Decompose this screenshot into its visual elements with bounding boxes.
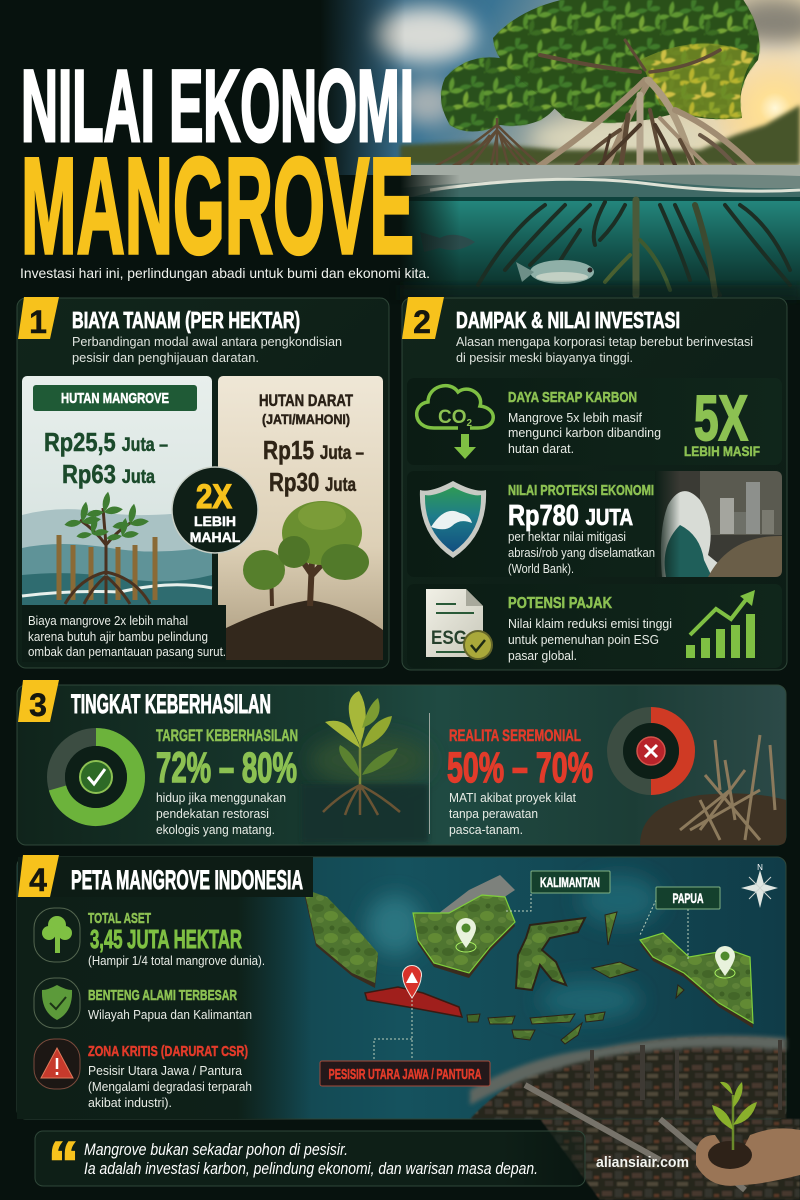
heading strip 4: 4 [29, 862, 47, 898]
mangrove price: Rp25,5 Juta – [44, 427, 168, 457]
island: north borneo [439, 875, 515, 913]
underwater roots [478, 200, 790, 295]
small tree [243, 550, 285, 606]
left dark panel [17, 897, 312, 1119]
fact: zona kritis: Pesisir Utara Jawa / Pantura [88, 1063, 243, 1078]
heading 1: BIAYA TANAM (PER HEKTAR) [72, 307, 300, 333]
far tree line [400, 105, 800, 165]
hero image: mangrove scene [320, 0, 800, 300]
title [21, 49, 414, 283]
quote box: Ia adalah investasi karbon, pelindung ekonomi, dan warisan masa depan. [84, 1159, 538, 1178]
clouds [373, 0, 800, 158]
carbon text: DAYA SERAP KARBON [508, 389, 637, 406]
description 2 [456, 334, 753, 365]
description 2: Alasan mengapa korporasi tetap berebut berinvestasi [456, 334, 753, 349]
island: papua [640, 933, 753, 1028]
badge 1: 1 [29, 304, 47, 340]
fact: total aset [34, 908, 265, 968]
fact: zona kritis: akibat industri). [88, 1095, 172, 1110]
protection text: per hektar nilai mitigasi [508, 530, 626, 544]
protection text: abrasi/rob yang diselamatkan [508, 546, 655, 560]
dead mangrove backdrop [640, 735, 786, 845]
panel 3 background [17, 685, 786, 845]
protection text: NILAI PROTEKSI EKONOMI [508, 483, 654, 499]
protection text: Rp780 JUTA [508, 500, 633, 532]
badge 2: 2 [413, 304, 431, 340]
panel 4: peta mangrove indonesia [17, 855, 786, 1160]
panel 2: dampak dan nilai investasi [402, 297, 787, 670]
icon: CO2 cloud: 2 [466, 418, 472, 429]
description 1: Perbandingan modal awal antara pengkondisian [72, 334, 342, 349]
carbon text: mengunci karbon dibanding [508, 426, 661, 440]
badge: 2x lebih mahal: LEBIH [194, 513, 236, 529]
industrial ground behind panel 4 bottom [540, 1119, 800, 1200]
badge: 2x lebih mahal [172, 467, 258, 553]
caption: mangrove cost: Biaya mangrove 2x lebih mahal [28, 614, 188, 628]
card: carbon absorption [407, 378, 782, 465]
panel 2 background [402, 298, 787, 670]
mangrove price: Rp63 Juta [62, 459, 155, 489]
carbon text: hutan darat. [508, 442, 574, 456]
subtitle: Investasi hari ini, perlindungan abadi untuk bumi dan ekonomi kita. [20, 265, 430, 281]
island: sumatra [304, 889, 378, 988]
wave and city image [655, 471, 782, 577]
sea texture [367, 875, 660, 1020]
heading 3: TINGKAT KEBERHASILAN [71, 689, 271, 719]
card: hutan darat [218, 376, 383, 660]
panel 1 background [17, 298, 389, 668]
divider [429, 713, 430, 834]
island: nusa tenggara [467, 1012, 605, 1044]
target text [156, 726, 298, 837]
island: sulawesi [516, 918, 585, 990]
panel 3: tingkat keberhasilan [17, 680, 786, 845]
forest backdrop [302, 735, 430, 842]
heading strip 4 [18, 855, 313, 898]
caption: mangrove cost: karena butuh ajir bambu pelindung [28, 630, 208, 644]
watermark: aliansiair.com [596, 1154, 689, 1171]
carbon text [508, 389, 661, 456]
tax text: POTENSI PAJAK [508, 595, 613, 612]
big tree crown [493, 0, 760, 123]
target text: TARGET KEBERHASILAN [156, 726, 298, 745]
badge 2 [402, 297, 444, 340]
stat: 5x: 5X [694, 382, 748, 454]
target text: ekologis yang matang. [156, 822, 275, 837]
caption: mangrove cost: ombak dan pemantauan pasang surut. [28, 645, 226, 659]
realita text: tanpa perawatan [449, 806, 538, 821]
leader lines [374, 882, 688, 1060]
hutan darat label: HUTAN DARAT [259, 391, 353, 410]
label: pantura: PESISIR UTARA JAWA / PANTURA [328, 1067, 482, 1083]
stat: 5x: LEBIH MASIF [684, 443, 760, 459]
badge 1 [18, 297, 59, 340]
map background [17, 857, 786, 1119]
target text: pendekatan restorasi [156, 806, 269, 821]
icon: hands holding seedling [696, 1082, 800, 1186]
big tree [278, 501, 369, 606]
pin: kalimantan [456, 918, 476, 952]
icon: CO2 cloud [417, 386, 493, 459]
panel 1: biaya tanam [17, 297, 389, 668]
fade into page [320, 0, 405, 175]
carbon text: Mangrove 5x lebih masif [508, 411, 643, 425]
realita donut [615, 715, 687, 787]
icon: quotation mark: “ [48, 1130, 79, 1199]
title: NILAI EKONOMI [21, 49, 414, 163]
islands [304, 875, 753, 1044]
hutan darat label: (JATI/MAHONI) [262, 411, 350, 427]
icon: ESG document [426, 589, 492, 659]
description 2: di pesisir meski biayanya tinggi. [456, 350, 633, 365]
realita text: pasca-tanam. [449, 822, 523, 837]
card: tax potential [407, 584, 782, 668]
fact: total aset: 3,45 JUTA HEKTAR [90, 924, 242, 954]
darat price [263, 435, 364, 497]
protection text [508, 483, 655, 576]
badge: 2x lebih mahal: 2X [196, 478, 232, 516]
icon: ESG document: ESG [431, 628, 467, 649]
mangrove label [33, 385, 197, 411]
badge 3: 3 [29, 687, 47, 723]
pin: java warning [402, 965, 422, 998]
quote box: Mangrove bukan sekadar pohon di pesisir. [84, 1140, 348, 1159]
island: maluku [592, 912, 684, 998]
icon: CO2 cloud: CO [438, 407, 466, 428]
label: papua [656, 887, 720, 909]
fact: zona kritis: ZONA KRITIS (DARURAT CSR) [88, 1043, 248, 1060]
label: papua: PAPUA [672, 890, 704, 906]
road on the ground [660, 1119, 745, 1190]
underwater [400, 197, 800, 300]
target donut [56, 737, 136, 817]
icon: growth chart [686, 590, 755, 658]
fact: benteng alami: Wilayah Papua dan Kalimantan [88, 1007, 252, 1022]
island: java [365, 987, 462, 1017]
tax text: Nilai klaim reduksi emisi tinggi [508, 617, 672, 631]
fact: benteng alami [34, 978, 252, 1028]
fact: total aset: (Hampir 1/4 total mangrove dunia). [88, 953, 265, 968]
pin: papua [715, 946, 735, 978]
card: economic protection [407, 471, 782, 577]
icon: shield [34, 978, 80, 1028]
target text: 72% – 80% [156, 744, 297, 792]
icon: compass [741, 863, 778, 908]
icon: warning [34, 1039, 80, 1089]
fact: benteng alami: BENTENG ALAMI TERBESAR [88, 987, 237, 1004]
tax text: untuk pemenuhan poin ESG [508, 633, 659, 647]
darat price: Rp15 Juta – [263, 435, 364, 465]
background fish [420, 232, 475, 252]
industrial coast [470, 1036, 786, 1160]
fact: zona kritis: (Mengalami degradasi terparah [88, 1079, 252, 1094]
quote box [35, 1130, 585, 1199]
hutan darat label [259, 391, 353, 427]
heading 2: DAMPAK & NILAI INVESTASI [456, 307, 680, 333]
heading strip 4: PETA MANGROVE INDONESIA [71, 865, 303, 895]
badge 3 [18, 680, 59, 723]
fact: total aset: TOTAL ASET [88, 910, 151, 927]
icon: wave shield [420, 481, 486, 558]
protection text: (World Bank). [508, 562, 574, 576]
fish [516, 260, 594, 284]
tax text: pasar global. [508, 649, 577, 663]
small tree crown [441, 57, 560, 132]
mangrove price [44, 427, 168, 489]
label: pantura [320, 1061, 490, 1086]
realita text: REALITA SEREMONIAL [449, 726, 581, 745]
mangrove seedling [64, 492, 150, 604]
small tree roots [432, 118, 545, 172]
water band [400, 165, 800, 197]
target text: hidup jika menggunakan [156, 790, 286, 805]
description 1: pesisir dan penghijauan daratan. [72, 350, 259, 365]
mangrove seedling [323, 691, 400, 815]
island: kalimantan [413, 895, 515, 978]
icon: compass: N [757, 863, 763, 872]
badge: 2x lebih mahal: MAHAL [190, 529, 241, 545]
sun [713, 46, 800, 170]
bamboo fence [59, 535, 155, 600]
realita text: 50% – 70% [447, 744, 593, 792]
big tree branches and roots [525, 40, 765, 178]
realita text [447, 726, 593, 837]
fact: zona kritis [34, 1039, 252, 1110]
label: kalimantan [531, 871, 610, 893]
card: hutan mangrove [22, 376, 212, 616]
description 1 [72, 334, 342, 365]
sea waves [22, 509, 212, 605]
tax text [508, 595, 672, 663]
mangrove label: HUTAN MANGROVE [61, 390, 169, 407]
label: kalimantan: KALIMANTAN [540, 874, 600, 890]
icon: tree [34, 908, 80, 962]
caption: mangrove cost [22, 605, 226, 662]
soil mound [218, 600, 383, 660]
darat price: Rp30 Juta [269, 467, 356, 497]
realita text: MATI akibat proyek kilat [449, 790, 576, 805]
